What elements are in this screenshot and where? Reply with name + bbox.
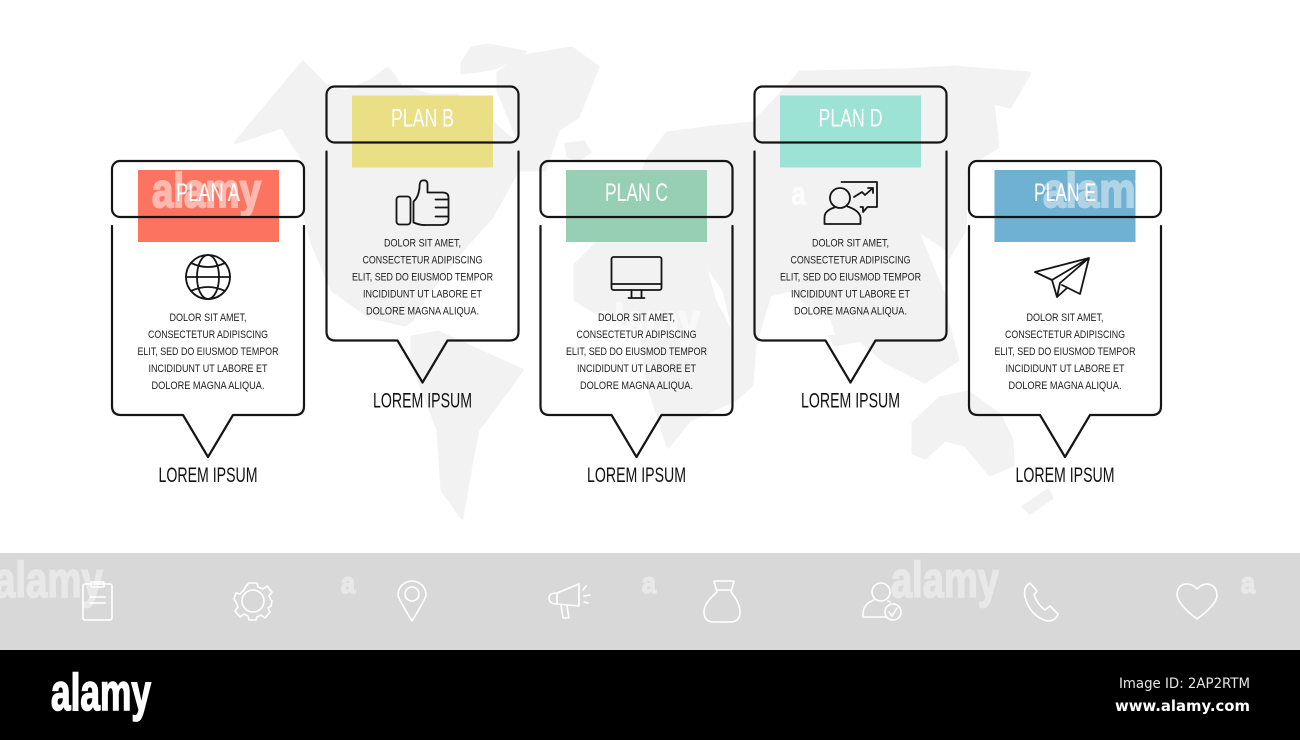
Plan D label: LOREM IPSUM: [801, 390, 900, 412]
Plan C text: [566, 312, 707, 392]
Plan C text: DOLOR SIT AMET,: [598, 312, 675, 324]
Plan B colour block: [352, 96, 493, 168]
Plan B title: PLAN B: [391, 104, 454, 132]
Plan B label: LOREM IPSUM: [373, 390, 472, 412]
Plan E colour block: [994, 170, 1136, 242]
Plan B header frame: [326, 86, 518, 142]
Plan B text: CONSECTETUR ADIPISCING: [362, 254, 482, 266]
card: Plan B: [326, 86, 518, 412]
icon: user with check: [863, 583, 901, 620]
panel: black footer: [0, 650, 1300, 740]
card: Plan A: [112, 161, 304, 487]
icon: globe: [186, 255, 230, 299]
Plan D header frame: [754, 86, 946, 142]
Plan C label: LOREM IPSUM: [587, 464, 686, 487]
icon: gear: [234, 583, 272, 620]
Plan A text: CONSECTETUR ADIPISCING: [148, 329, 268, 341]
icon: heart: [1177, 584, 1217, 619]
Plan E text: ELIT, SED DO EIUSMOD TEMPOR: [994, 346, 1136, 358]
Plan A text: [138, 312, 279, 392]
Plan D text: DOLORE MAGNA ALIQUA.: [794, 306, 907, 318]
card: Plan E: [969, 161, 1161, 487]
Plan E label: LOREM IPSUM: [1016, 464, 1114, 487]
Plan C colour block: [566, 170, 707, 242]
icon: paper plane: [1035, 258, 1089, 297]
Plan E callout outline: [969, 226, 1161, 457]
Plan E title: PLAN E: [1034, 179, 1096, 207]
band watermarks: [0, 552, 1255, 608]
Plan D callout outline: [754, 152, 946, 382]
world map background: [235, 45, 1052, 518]
Plan D text: [780, 238, 921, 318]
Plan C callout outline: [540, 226, 732, 457]
Plan C title: PLAN C: [605, 179, 668, 207]
Plan B callout outline: [326, 152, 518, 382]
icon: person with chart: [824, 182, 877, 224]
icon: monitor: [612, 257, 662, 298]
card: Plan C: [540, 161, 732, 487]
Plan B text: DOLORE MAGNA ALIQUA.: [366, 306, 479, 318]
band watermarks: a: [1241, 567, 1255, 600]
Plan E header frame: [969, 161, 1161, 217]
Plan C header frame: [540, 161, 732, 217]
Plan A label: LOREM IPSUM: [158, 464, 258, 487]
Plan B text: INCIDIDUNT UT LABORE ET: [363, 288, 482, 300]
icon: phone: [1025, 583, 1058, 621]
Plan A callout outline: [112, 226, 304, 457]
Plan D text: INCIDIDUNT UT LABORE ET: [791, 288, 910, 300]
Plan A header frame: [112, 161, 304, 217]
band watermarks: alamy: [891, 552, 999, 608]
Plan A colour block: [138, 170, 279, 242]
Plan A title: PLAN A: [176, 179, 240, 207]
Plan E text: DOLORE MAGNA ALIQUA.: [1008, 380, 1122, 392]
band watermarks: a: [642, 567, 656, 600]
Plan B text: [352, 238, 493, 318]
Plan A text: DOLORE MAGNA ALIQUA.: [152, 380, 264, 392]
Plan E watermark: alamy: [1043, 165, 1158, 218]
Plan C watermark: alamy: [594, 295, 700, 347]
alamy logo: alamy: [51, 664, 151, 722]
Plan D text: DOLOR SIT AMET,: [812, 238, 889, 250]
Plan A watermark: alamy: [152, 165, 261, 218]
map sea gaps: [708, 233, 950, 335]
Plan C text: CONSECTETUR ADIPISCING: [576, 329, 696, 341]
Plan E text: DOLOR SIT AMET,: [1026, 312, 1104, 324]
Plan E text: CONSECTETUR ADIPISCING: [1005, 329, 1125, 341]
Plan A text: ELIT, SED DO EIUSMOD TEMPOR: [138, 346, 279, 358]
Plan D text: CONSECTETUR ADIPISCING: [790, 254, 910, 266]
Plan E text: [994, 312, 1136, 392]
Plan A text: DOLOR SIT AMET,: [170, 312, 246, 324]
Plan C text: DOLORE MAGNA ALIQUA.: [580, 380, 693, 392]
band watermarks: a: [341, 567, 355, 600]
Plan D watermark: a: [792, 176, 806, 212]
icon: thumbs up: [396, 180, 448, 225]
Plan E text: INCIDIDUNT UT LABORE ET: [1006, 363, 1125, 375]
icon: megaphone: [549, 584, 590, 618]
Plan C text: ELIT, SED DO EIUSMOD TEMPOR: [566, 346, 707, 358]
Plan D title: PLAN D: [818, 104, 882, 132]
icon: money bag: [704, 581, 740, 622]
icon: map pin: [398, 581, 426, 621]
Plan D colour block: [780, 96, 921, 168]
image id: Image ID: 2AP2RTM: [1119, 676, 1250, 692]
Plan B text: DOLOR SIT AMET,: [384, 238, 461, 250]
Plan A text: INCIDIDUNT UT LABORE ET: [148, 363, 268, 375]
card: Plan D: [754, 86, 946, 412]
Plan C text: INCIDIDUNT UT LABORE ET: [577, 363, 696, 375]
Plan B text: ELIT, SED DO EIUSMOD TEMPOR: [352, 272, 493, 284]
website: www.alamy.com: [1115, 697, 1250, 715]
panel: grey icon band: [0, 552, 1300, 650]
Plan D text: ELIT, SED DO EIUSMOD TEMPOR: [780, 272, 921, 284]
icon: clipboard: [83, 582, 112, 620]
